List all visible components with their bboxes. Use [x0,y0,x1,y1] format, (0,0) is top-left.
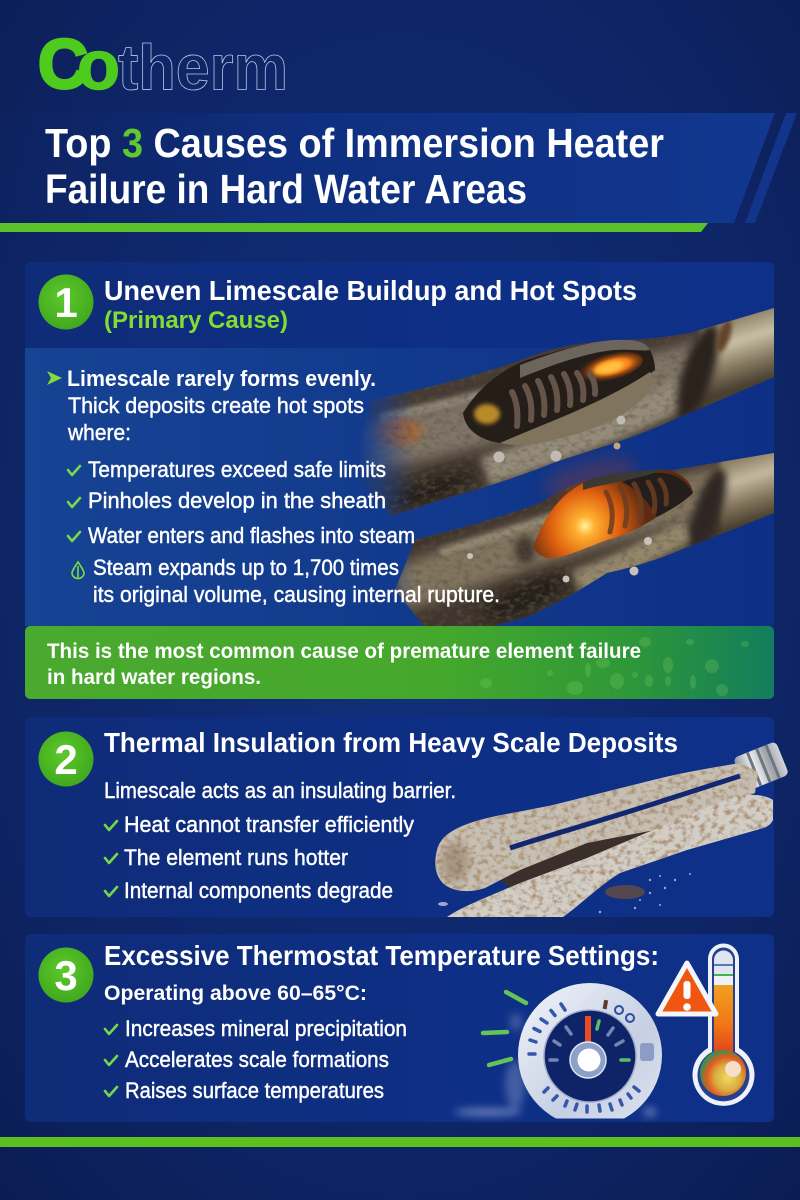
panel 2 heading: Thermal Insulation from Heavy Scale Deposits [104,727,678,758]
panel 1 number badge [38,274,94,330]
panel 2 checklist: The element runs hotter [124,845,348,870]
title: Failure in Hard Water Areas [45,166,527,212]
panel 1 steam note [72,555,500,607]
icon: thermostat dial [518,983,662,1127]
panel 1 steam note: Steam expands up to 1,700 times [93,555,399,580]
rust on bend [441,842,469,882]
panel 3 checklist: Increases mineral precipitation [125,1016,407,1041]
panel 1 checklist: Temperatures exceed safe limits [88,457,386,482]
panel 1 text: where: [67,420,131,445]
panel 3 heading: Excessive Thermostat Temperature Settings: [104,940,659,971]
panel 3: thermostat settings [25,934,774,1127]
panel 1 number badge: 1 [54,279,78,326]
dial hub [570,1042,606,1078]
panel 2 checklist: Heat cannot transfer efficiently [124,812,415,837]
dial outer ticks [529,1004,639,1112]
panel 3 number badge [38,948,94,1002]
lower pipe beads [467,537,652,582]
shadow between tubes [500,830,652,888]
panel 1 callout: in hard water regions. [47,666,261,689]
panel 2: thermal insulation [25,717,789,917]
top tube and bend [435,763,758,891]
lower tube [447,795,773,917]
panel 2 checklist [105,812,415,903]
steam [454,1013,657,1117]
panel 3 background [25,934,774,1122]
water droplets [480,637,749,696]
title banner [0,113,797,232]
panel 1 checklist: Pinholes develop in the sheath [88,488,386,513]
upper pipe beads [494,416,626,462]
panel 1 heading [104,275,637,334]
panel 1 text: Thick deposits create hot spots [68,393,364,418]
panel 3 checklist: Raises surface temperatures [125,1078,384,1103]
dial inner ticks [550,1021,629,1060]
logo: Cotherm: therm [118,32,288,104]
panel 2 checklist: Internal components degrade [124,878,393,903]
panel 1 checklist [68,457,415,548]
scale dust [438,873,691,913]
upper pipe rupture [463,340,655,445]
panel 1: uneven limescale buildup [25,262,790,699]
element connector [733,741,789,792]
icon: heat rays [483,992,526,1065]
panel 1 background [25,262,774,626]
panel 2 number badge: 2 [54,736,78,783]
title: Top 3 Causes of Immersion Heater [45,120,664,166]
panel 1 heading: Uneven Limescale Buildup and Hot Spots [104,275,637,306]
lower pipe rupture with glow [533,450,693,558]
panel 1 checklist: Water enters and flashes into steam [88,523,415,548]
image: ruptured heater pipe, upper [362,308,774,516]
image: scaled heating element [435,741,789,917]
icon: warning triangle [658,963,716,1014]
panel 1 steam note: its original volume, causing internal rupture. [93,582,500,607]
panel 3 intro: Operating above 60–65°C: [104,981,367,1005]
image: ruptured heater pipe, lower [395,452,774,626]
panel 1 text: Limescale rarely forms evenly. [67,366,376,391]
panel 1 callout [25,626,774,699]
arrow bullet [47,371,62,385]
bottom green bar [0,1137,800,1147]
logo: Cotherm: o [77,26,120,104]
panel 3 number badge: 3 [54,952,78,999]
element tubes [435,763,773,917]
icon: thermometer [692,943,754,1106]
panel 1 text [47,366,376,445]
panel 1 callout: This is the most common cause of premature element failure [47,640,641,663]
title [45,120,664,212]
dial scale marks [603,1000,654,1061]
panel 1 heading: (Primary Cause) [104,307,288,334]
panel 3 checklist: Accelerates scale formations [125,1047,389,1072]
logo: Cotherm: C [38,25,88,103]
logo: Cotherm [38,25,288,104]
panel 2 intro: Limescale acts as an insulating barrier. [104,778,456,803]
panel 2 number badge [38,732,94,786]
dial needle [585,1016,591,1042]
panel 3 checklist [105,1016,407,1103]
panel 2 background [25,717,774,917]
gap between tubes [510,776,740,848]
